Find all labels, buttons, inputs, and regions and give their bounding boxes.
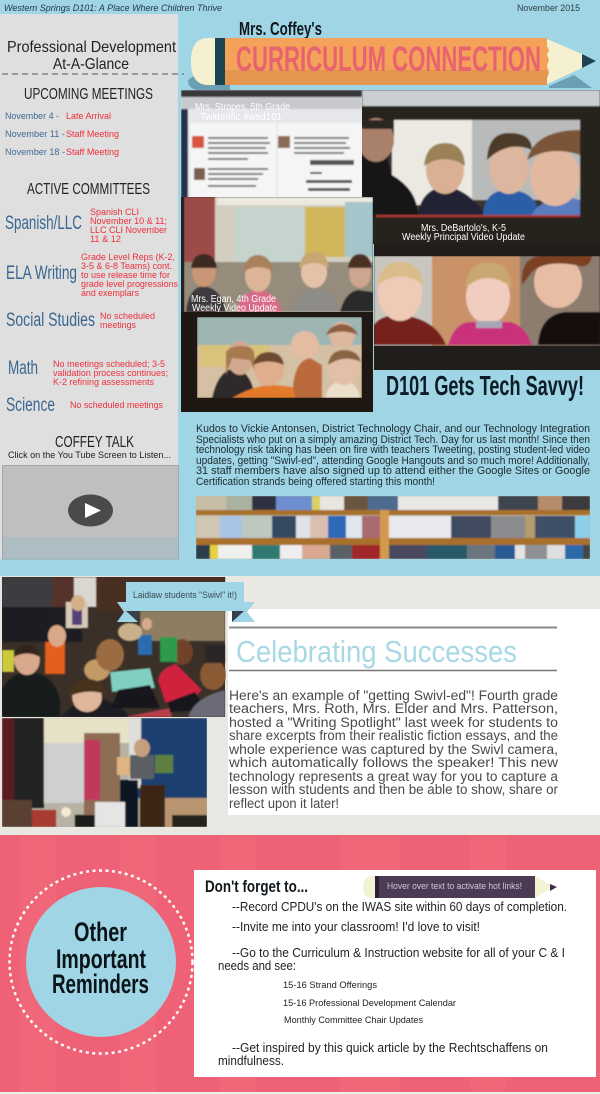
coffey talk heading xyxy=(8,434,171,461)
photo: Stropes Twitter screenshot xyxy=(181,90,362,198)
photo: student reading xyxy=(2,718,207,827)
photo: children in costume video xyxy=(374,243,600,370)
ribbon caption: Laidlaw students "Swivl" it!) xyxy=(133,590,237,600)
text block: kudos: Certification strands being offered starting this month! xyxy=(196,476,435,488)
text block: swivl story: share excerpts from their realistic fiction essays, and the xyxy=(229,728,558,743)
reminder list: --Invite me into your classroom! I'd love to visit! xyxy=(232,920,480,934)
committee: Science xyxy=(6,395,163,416)
reminder list: 15-16 Professional Development Calendar xyxy=(283,998,456,1009)
photo caption xyxy=(191,294,277,314)
meeting list: November 4 - xyxy=(5,111,59,122)
reminders card xyxy=(194,870,596,1077)
meeting list: November 18 - xyxy=(5,147,65,158)
committee: ELA Writing: Grade Level Reps (K-2, xyxy=(81,252,175,263)
text block: kudos xyxy=(196,423,590,488)
photo: classroom video xyxy=(181,312,373,412)
photo caption: Mrs. Stropes, 5th Grade xyxy=(195,102,290,113)
committee: ELA Writing: grade level progressions xyxy=(81,279,178,290)
reminder list: --Get inspired by this quick article by the Rechtschaffens on xyxy=(232,1041,548,1055)
reminder list: Monthly Committee Chair Updates xyxy=(284,1015,423,1026)
sidebar heading: Professional Development xyxy=(7,39,177,56)
photo caption: Weekly Video Update xyxy=(192,303,277,314)
meeting list: Late Arrival xyxy=(66,111,111,122)
committee: Spanish/LLC: Spanish/LLC xyxy=(5,213,82,234)
image: bookshelf xyxy=(196,496,590,559)
photo caption: Twitterific #wsd101 xyxy=(200,112,282,123)
text block: swivl story: lesson with students and then be able to show, share or xyxy=(229,782,558,797)
text block: swivl story: Here's an example of "getting Swivl-ed"! Fourth grade xyxy=(229,688,558,703)
mini pencil hint: Hover over text to activate hot links! xyxy=(387,881,522,891)
committee: Social Studies: meetings xyxy=(100,320,136,331)
circle badge: Other xyxy=(74,917,127,947)
reminder list: needs and see: xyxy=(218,959,296,973)
reminder list: 15-16 Strand Offerings xyxy=(283,980,377,991)
text block: swivl story: technology represents a great way for you to capture a xyxy=(229,769,558,784)
photo: Mrs. Egan video xyxy=(181,197,373,314)
reminder list: mindfulness. xyxy=(218,1054,284,1068)
text block: swivl story xyxy=(228,688,558,811)
text block: kudos: Kudos to Vickie Antonsen, District Technology Chair, and our Technology Integration xyxy=(196,423,590,435)
committee: Spanish/LLC: LLC CLI November xyxy=(90,225,167,236)
committee: Spanish/LLC: 11 & 12 xyxy=(90,234,121,245)
active committees heading: ACTIVE COMMITTEES xyxy=(27,181,150,198)
meeting list: November 11 - xyxy=(5,129,65,140)
circle badge: Important xyxy=(56,944,146,974)
committee: Spanish/LLC: Spanish CLI xyxy=(90,207,139,218)
committee: ELA Writing: ELA Writing xyxy=(6,263,77,284)
committee: Science: Science xyxy=(6,395,55,416)
upcoming meetings heading: UPCOMING MEETINGS xyxy=(24,86,153,103)
heading: celebrating successes: Celebrating Successes xyxy=(236,634,517,669)
photo caption xyxy=(402,223,525,243)
photo caption xyxy=(195,102,290,123)
photo: DeBartolo video xyxy=(358,90,600,244)
text block: swivl story: hosted a "Writing Spotlight" last week for students to xyxy=(229,715,558,730)
photo caption: Weekly Principal Video Update xyxy=(402,232,525,243)
meeting list xyxy=(5,111,119,158)
panel: other important reminders xyxy=(0,835,600,1094)
header tagline: Western Springs D101: A Place Where Children Thrive xyxy=(4,3,222,14)
committee: Spanish/LLC xyxy=(5,207,167,245)
sidebar heading: At-A-Glance xyxy=(53,56,129,73)
meeting list: Staff Meeting xyxy=(66,147,119,158)
photo caption: Mrs. Egan, 4th Grade xyxy=(191,294,276,305)
committee: Math: Math xyxy=(8,358,38,379)
committee: ELA Writing: and exemplars xyxy=(81,288,139,299)
text block: kudos: 31 staff members have also signed up to attend either the Google Sites or Google xyxy=(196,465,590,477)
video player xyxy=(2,465,178,559)
card heading: Don't forget to... xyxy=(205,877,308,896)
committee: Math: No meetings scheduled; 3-5 xyxy=(53,359,165,370)
committee: ELA Writing: 3-5 & 6-8 Teams) cont. xyxy=(81,261,172,272)
committee: Math xyxy=(8,358,168,388)
committee: Social Studies: No scheduled xyxy=(100,311,155,322)
committee: Social Studies: Social Studies xyxy=(6,310,95,331)
text block: swivl story: reflect upon it later! xyxy=(229,796,339,811)
text block: swivl story: which automatically follows the speaker! This new xyxy=(228,755,558,770)
committee: ELA Writing: to use release time for xyxy=(81,270,170,281)
coffey talk heading: Click on the You Tube Screen to Listen... xyxy=(8,450,171,461)
committee: Spanish/LLC: November 10 & 11; xyxy=(90,216,167,227)
committee: Math: K-2 refining assessments xyxy=(53,377,154,388)
committee: ELA Writing xyxy=(6,252,178,299)
committee: Math: validation process continues; xyxy=(53,368,168,379)
mini pencil hint xyxy=(363,876,557,898)
header date: November 2015 xyxy=(517,3,580,13)
committee: Science: No scheduled meetings xyxy=(70,400,163,411)
reminder list xyxy=(218,900,567,1068)
coffey talk heading: COFFEY TALK xyxy=(55,434,134,451)
meeting list: Staff Meeting xyxy=(66,129,119,140)
photo: students seated xyxy=(2,577,226,717)
reminder list: --Record CPDU's on the IWAS site within 60 days of completion. xyxy=(232,900,567,914)
circle badge xyxy=(10,870,192,1054)
pencil banner xyxy=(188,38,596,90)
panel: celebrating successes xyxy=(0,576,600,835)
sidebar heading xyxy=(7,39,177,73)
panel: professional development sidebar xyxy=(0,14,184,559)
title: Mrs. Coffey's: Mrs. Coffey's xyxy=(239,19,322,39)
text block: swivl story: whole experience was captured by the Swivl camera, xyxy=(228,742,558,757)
photo caption: Mrs. DeBartolo's, K-5 xyxy=(421,223,506,234)
ribbon caption xyxy=(117,582,255,622)
text block: swivl story: teachers, Mrs. Roth, Mrs. Elder and Mrs. Patterson, xyxy=(229,701,558,716)
reminder list: --Go to the Curriculum & Instruction website for all of your C & I xyxy=(232,946,565,960)
circle badge: Reminders xyxy=(52,969,149,999)
